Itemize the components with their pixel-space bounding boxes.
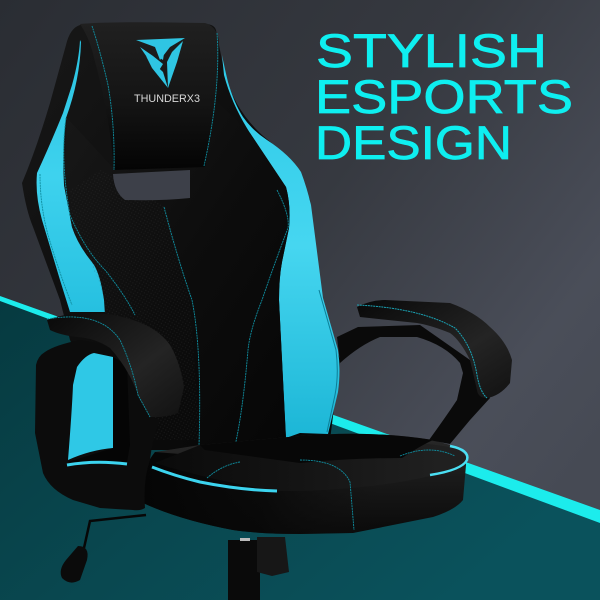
headline [315, 24, 573, 169]
stitching [40, 26, 300, 461]
headline line 3: DESIGN [315, 116, 512, 169]
chair base mechanism [228, 537, 289, 600]
glowing cyan floor line [0, 296, 600, 523]
teal floor [0, 297, 600, 600]
left armrest frame [35, 340, 160, 510]
lumbar black centre section [64, 100, 290, 450]
seat dark rear band [200, 434, 433, 463]
left arm stitching [47, 317, 150, 417]
logo emblem [136, 38, 185, 88]
left cyan side panel [37, 40, 106, 312]
left arm piping [67, 462, 127, 465]
right armrest support [337, 325, 490, 444]
left seat piping [152, 467, 277, 491]
left arm opening cyan panel [68, 353, 113, 460]
seat stitching [207, 450, 455, 530]
chair back silhouette [22, 24, 340, 450]
right seat piping [430, 446, 467, 475]
seat cushion side [142, 434, 466, 534]
right panel stitching [319, 290, 337, 432]
right armrest pad [357, 300, 512, 398]
headline line 1: STYLISH [316, 24, 547, 77]
logo wordmark: THUNDERX3 [134, 93, 200, 105]
seat left darkening [142, 452, 380, 534]
left arm opening shadow [68, 357, 130, 462]
headline line 2: ESPORTS [315, 70, 573, 123]
headrest gap [113, 170, 190, 200]
headrest [80, 22, 219, 170]
right cyan side panel [222, 55, 340, 438]
left armrest pad [47, 313, 184, 417]
back perforation texture [70, 170, 200, 440]
right arm stitching [357, 305, 487, 398]
tilt lever [61, 515, 146, 583]
gaming chair [22, 22, 512, 600]
seat textured top [155, 439, 466, 491]
